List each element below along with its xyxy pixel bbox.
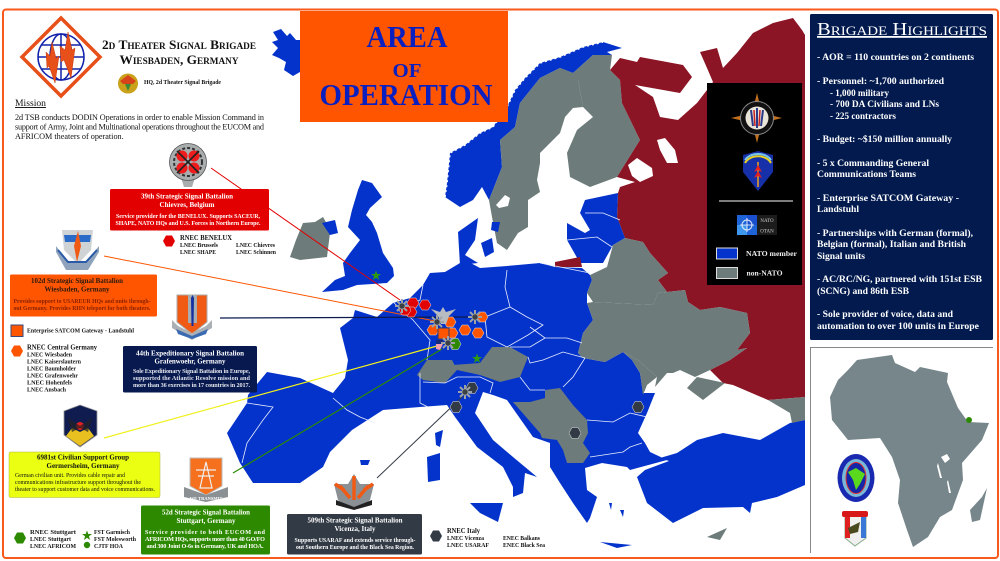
caption: HQ: HQ, 2d Theater Signal Brigade (144, 80, 221, 86)
panel: 44th Expeditionary Signal Battalion: Sole Expeditionary Signal Battalion in Europe, (133, 368, 250, 375)
title text: OPERATION (320, 77, 492, 112)
country: Denmark (458, 218, 500, 265)
panel: 52d Strategic Signal Battalion: 52d Strategic Signal Battalion (162, 508, 251, 516)
highlights list: - 225 contractors (830, 111, 896, 121)
legend: RNEC Stuttgart: LNEC Stuttgart (30, 537, 71, 543)
country: Austria (453, 347, 528, 382)
legend: NATO member: NATO member (746, 249, 798, 258)
panel: 102d Strategic Signal Battalion: out Germany. Provides RHN teleport for both theaters. (14, 305, 151, 312)
marker: RNEC Stuttgart hexagon (449, 338, 461, 350)
panel: 52d Strategic Signal Battalion: Stuttgart, Germany (176, 516, 236, 525)
country: Moldova (623, 352, 657, 395)
heading: brigade highlights: Brigade Highlights (817, 19, 987, 39)
marker: RNEC Central Germany hexagons (427, 312, 488, 338)
icon: globe (38, 34, 84, 80)
panel: 52d Strategic Signal Battalion (141, 506, 270, 554)
icon: SETAF shield (842, 511, 868, 546)
highlights list: - AC/RC/NG, partnered with 151st ESB (817, 274, 982, 284)
panel: brigade highlights (810, 14, 993, 340)
legend: RNEC Central Germany: LNEC Kaiserslautern (27, 360, 82, 366)
heading: brigade name: 2d Theater Signal Brigade (102, 37, 256, 52)
panel: 6981st Civilian Support Group: German civilian unit. Provides cable repair and (15, 473, 125, 479)
panel: 39th Strategic Signal Battalion: SHAPE, NATO HQs and U.S. Forces in Northern Europe. (116, 220, 261, 227)
panel: 102d Strategic Signal Battalion: Provides support to USAREUR HQs and units through- (14, 298, 150, 305)
islands (360, 430, 632, 548)
panel: 6981st Civilian Support Group: communications infrastructure support throughout the (15, 479, 141, 486)
title text: AREA (366, 19, 448, 54)
icon: AFRICOM seal (838, 454, 874, 502)
icon: NATO OTAN logo: OTAN (760, 230, 774, 234)
legend: RNEC BENELUX: RNEC BENELUX (180, 234, 232, 242)
line: 102d battalion (104, 256, 440, 322)
panel: 44th Expeditionary Signal Battalion: 44th Expeditionary Signal Battalion (136, 348, 245, 358)
country: Switzerland (417, 360, 457, 383)
country: Georgia (768, 397, 805, 423)
highlights list: Landstuhl (817, 204, 860, 214)
marker: SATCOM gateway square (438, 328, 449, 339)
crest: 52d battalion: WE TRANSMIT (190, 496, 222, 501)
panel: 509th Strategic Signal Battalion: Supports USARAF and extends service through- (294, 537, 416, 544)
legend: RNEC BENELUX: LNEC Brussels (180, 243, 219, 249)
crest: 44th battalion (172, 295, 212, 340)
highlights list: - Sole provider of voice, data and (817, 309, 953, 319)
highlights list: Belgian (formal), Italian and British (817, 239, 966, 249)
highlights list: - Budget: ~$150 million annually (817, 134, 953, 144)
crest: 102d battalion (56, 230, 99, 270)
panel: 509th Strategic Signal Battalion (287, 514, 422, 554)
panel: 44th Expeditionary Signal Battalion (123, 346, 257, 392)
line: 52d battalion (233, 349, 442, 473)
map: Africa (830, 355, 989, 547)
europe map (227, 18, 805, 548)
mission text: 2d TSB conducts DODIN Operations in order to enable Mission Command in (15, 113, 264, 122)
country: Cyprus (707, 528, 727, 540)
legend: RNEC Central Germany: LNEC Ansbach (27, 388, 67, 394)
legend: RNEC Stuttgart (14, 529, 137, 550)
legend: RNEC Stuttgart: FST Molesworth (94, 537, 137, 543)
country: Finland (560, 55, 640, 187)
panel: 509th Strategic Signal Battalion: 509th Strategic Signal Battalion (308, 516, 403, 524)
mission text: AFRICOM theaters of operation. (15, 132, 124, 141)
panel: 509th Strategic Signal Battalion: out Southern Europe and the Black Sea Region. (296, 544, 414, 551)
marker: FST stars (371, 270, 482, 363)
panel: 44th Expeditionary Signal Battalion: Grafenwoehr, Germany (154, 356, 226, 366)
legend: RNEC Stuttgart: FST Garmisch (94, 530, 131, 536)
legend: RNEC Central Germany: RNEC Central Germany (27, 344, 97, 352)
country: Russia (610, 18, 805, 400)
panel: 102d Strategic Signal Battalion: Wiesbaden, Germany (44, 284, 110, 294)
panel: 6981st Civilian Support Group: Germersheim, Germany (46, 461, 120, 470)
legend: RNEC Italy: ENEC Black Sea (503, 543, 545, 549)
icon: USAREUR shield (743, 151, 773, 191)
country: Norway (445, 42, 622, 207)
legend: RNEC Central Germany: LNEC Hohenfels (27, 380, 73, 386)
panel: 6981st Civilian Support Group: 6981st Civilian Support Group (37, 452, 129, 462)
Norway fjords (445, 42, 603, 197)
highlights list: - 1,000 military (830, 88, 889, 98)
crest: 6981st Civilian Support Group (64, 405, 97, 447)
icon: lightning bolts (46, 32, 75, 83)
legend: RNEC BENELUX (163, 234, 277, 256)
panel: 39th Strategic Signal Battalion: Service provider for the BENELUX. Supports SACEUR, (116, 213, 260, 220)
legend: RNEC Central Germany: LNEC Grafenwoehr (27, 374, 78, 380)
continental NATO members (227, 260, 667, 523)
panel: 39th Strategic Signal Battalion: 39th Strategic Signal Battalion (141, 192, 234, 200)
panel: 6981st Civilian Support Group (9, 452, 160, 498)
country: Sweden (489, 68, 583, 250)
title box: area of operation (300, 11, 508, 122)
panel: 102d Strategic Signal Battalion (10, 274, 157, 316)
crest: 509th battalion (334, 474, 374, 510)
legend: non-NATO: non-NATO (746, 268, 783, 278)
national borders (242, 213, 647, 463)
divider (719, 200, 793, 202)
country: United Kingdom (322, 180, 394, 292)
legend: RNEC Central Germany: LNEC Baumholder (27, 366, 76, 372)
highlights list: - Personnel: ~1,700 authorized (817, 76, 944, 86)
legend: RNEC BENELUX: LNEC Chievres (236, 243, 276, 249)
country: Ukraine (578, 290, 750, 387)
marker: RNEC BENELUX hexagons (399, 298, 431, 317)
country: Belarus (587, 238, 668, 305)
legend: Enterprise SATCOM Gateway (11, 325, 134, 336)
highlights list: - 700 DA Civilians and LNs (830, 99, 940, 109)
panel: 52d Strategic Signal Battalion: Service provider to both EUCOM and (145, 529, 266, 536)
brigade logo diamond (22, 18, 100, 96)
country: Iceland (272, 29, 300, 76)
country: Ireland (290, 217, 330, 260)
legend: RNEC Italy: LNEC Vicenza (447, 536, 484, 542)
panel: black NATO legend (707, 83, 802, 285)
legend: RNEC Italy: LNEC USARAF (447, 543, 489, 549)
panel: 39th Strategic Signal Battalion: Chievres, Belgium (160, 200, 215, 209)
legend: RNEC Italy: ENEC Balkans (503, 536, 541, 542)
mission heading: Mission (15, 99, 46, 109)
map markers (371, 270, 644, 438)
icon: EUCOM compass seal (731, 93, 782, 143)
highlights list: - Partnerships with German (formal), (817, 228, 973, 238)
highlights list: - AOR = 110 countries on 2 continents (817, 52, 975, 62)
marker: Germersheim flag (436, 340, 443, 350)
legend: RNEC BENELUX: LNEC SHAPE (180, 250, 216, 256)
panel: 6981st Civilian Support Group: theater to support customer data and voice communications. (15, 487, 155, 493)
panel: 52d Strategic Signal Battalion: and 300 Joint O-6s in Germany, UK and HOA. (146, 543, 264, 550)
country: Crimea (687, 377, 725, 400)
legend: RNEC Central Germany: LNEC Wiesbaden (27, 352, 73, 358)
legend: RNEC Stuttgart: CJTF HOA (94, 544, 124, 550)
legend: RNEC Italy (430, 527, 545, 549)
legend: NATO member (716, 248, 798, 259)
Africa lakes (937, 454, 951, 493)
line: 6981st group (104, 346, 437, 438)
highlights list: - Enterprise SATCOM Gateway - (817, 193, 959, 203)
panel: Africa inset (810, 348, 993, 553)
highlights list: Communications Teams (817, 169, 917, 179)
crest: 39th battalion (170, 144, 206, 187)
title text (320, 19, 492, 112)
highlights list: automation to over 100 units in Europe (817, 321, 979, 331)
legend: RNEC BENELUX: LNEC Schinnen (236, 250, 277, 256)
panel: 44th Expeditionary Signal Battalion: supported the Atlantic Resolve mission and (133, 375, 251, 382)
highlights list: (SCNG) and 86th ESB (817, 286, 909, 296)
icon: NATO OTAN logo (737, 215, 777, 235)
legend: RNEC Stuttgart: LNEC AFRICOM (30, 544, 76, 550)
icon: HQ crest (118, 74, 138, 94)
country: Balkans non-NATO (513, 388, 590, 463)
marker: CJTF HOA (966, 417, 972, 423)
connector lines (104, 168, 472, 478)
country: Kaliningrad (555, 257, 582, 267)
crest: 52d battalion (184, 458, 228, 502)
Swedish lakes (496, 195, 510, 208)
mission text (15, 113, 264, 141)
legend: Enterprise SATCOM Gateway: Enterprise SATCOM Gateway - Landstuhl (27, 328, 134, 334)
marker: battalion crest bursts (395, 299, 482, 399)
line: 44th battalion (220, 317, 472, 318)
legend: RNEC Central Germany (11, 344, 97, 394)
title text: OF (392, 60, 422, 82)
line: 509th battalion (377, 396, 463, 478)
country: Turkey (637, 420, 805, 523)
heading: brigade name: Wiesbaden, Germany (120, 52, 239, 67)
lakes (628, 30, 737, 182)
highlights list (817, 52, 982, 331)
icon: NATO OTAN logo: NATO (760, 219, 774, 224)
panel: 509th Strategic Signal Battalion: Vicenza, Italy (334, 524, 376, 533)
marker: RNEC Italy hexagons (450, 382, 644, 438)
legend: non-NATO (716, 268, 783, 278)
panel: 39th Strategic Signal Battalion (110, 189, 269, 230)
highlights list: - 5 x Commanding General (817, 158, 930, 168)
mission text: support of Army, Joint and Multinational operations throughout the EUCOM and (15, 122, 264, 132)
marker: eagle (431, 307, 456, 324)
panel: 102d Strategic Signal Battalion: 102d Strategic Signal Battalion (31, 276, 124, 285)
heading: brigade name (102, 37, 256, 67)
legend: RNEC Italy: RNEC Italy (447, 527, 480, 535)
panel: 44th Expeditionary Signal Battalion: more than 36 exercises in 17 countries in 2017. (133, 382, 250, 389)
country: Baltic states (567, 193, 625, 263)
legend: RNEC Stuttgart: RNEC Stuttgart (30, 529, 77, 536)
panel: 52d Strategic Signal Battalion: AFRICOM HQs, supports more than 40 GO/FO (145, 536, 265, 543)
line: 39th battalion (211, 168, 400, 300)
highlights list: Signal units (817, 251, 866, 261)
